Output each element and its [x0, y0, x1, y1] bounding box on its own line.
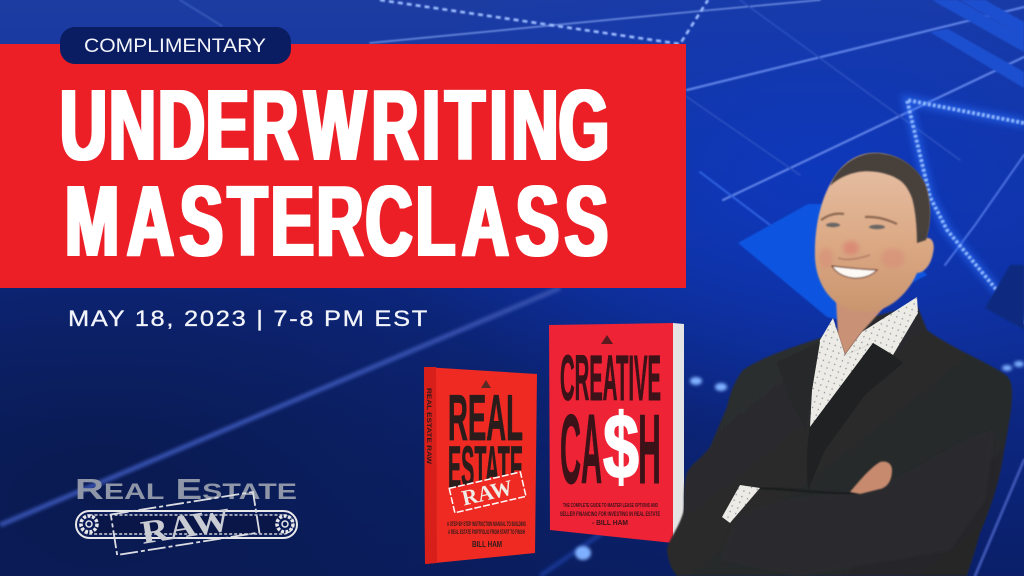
RAW stamp	[111, 492, 260, 556]
book: Real Estate Raw: A REAL ESTATE PORTFOLIO FROM START TO FINISH	[448, 530, 525, 536]
logo: Real Estate Raw	[75, 474, 297, 556]
book: Real Estate Raw: BILL HAM	[472, 540, 502, 549]
neck	[836, 295, 895, 355]
hair	[830, 153, 930, 243]
eyes and brows	[821, 214, 897, 259]
dotted glowing lines	[380, 0, 1024, 323]
smile	[832, 266, 877, 278]
book: Real Estate Raw: A STEP-BY-STEP INSTRUCTION MANUAL TO BUILDING	[447, 522, 526, 528]
glowing dots	[575, 361, 1024, 560]
person: presenter in dark suit	[667, 153, 1012, 576]
book: Creative Cash: - BILL HAM	[592, 520, 628, 527]
shirt cuff	[722, 485, 760, 523]
house emblem	[601, 335, 613, 344]
head	[815, 153, 934, 312]
bright blue diamond	[738, 204, 927, 320]
red title banner	[0, 44, 686, 288]
book: Creative Cash: CA	[560, 394, 602, 504]
crossed arm	[720, 430, 995, 576]
title: Underwriting Masterclass: UNDERWRITING	[60, 69, 609, 181]
date and time: MAY 18, 2023 | 7-8 PM EST	[68, 306, 429, 331]
book: Real Estate Raw	[424, 367, 537, 564]
book: Creative Cash: H	[638, 394, 661, 504]
book: Creative Cash: THE COMPLETE GUIDE TO MASTER LEASE OPTIONS AND	[563, 503, 658, 509]
logo: Real Estate Raw: R EAL E STATE	[75, 474, 297, 506]
dollar sign: $	[603, 396, 639, 498]
book: Real Estate Raw: REAL	[448, 381, 523, 454]
emblem	[481, 380, 491, 388]
lapels	[807, 343, 903, 490]
title: Underwriting Masterclass	[60, 69, 609, 277]
conveyor belt	[76, 511, 297, 538]
book: Creative Cash: SELLER FINANCING FOR INVESTING IN REAL ESTATE	[560, 512, 660, 518]
text: ESTATE	[448, 435, 523, 500]
text: CREATIVE	[560, 342, 661, 414]
shirt	[810, 318, 873, 427]
book: Real Estate Raw: REAL ESTATE RAW	[425, 388, 432, 465]
diagonal bars top right	[930, 0, 1024, 88]
book: Creative Cash	[549, 323, 684, 543]
cheeks and nose	[819, 241, 905, 268]
pill: complimentary: COMPLIMENTARY	[84, 35, 266, 57]
hand	[850, 461, 892, 494]
pill: complimentary	[60, 27, 291, 64]
book: Real Estate Raw: RAW	[459, 475, 515, 510]
title: Underwriting Masterclass: MASTERCLASS	[65, 165, 608, 277]
RAW stamp: RAW	[138, 502, 233, 552]
gears	[81, 516, 293, 532]
jacket	[667, 305, 1012, 576]
